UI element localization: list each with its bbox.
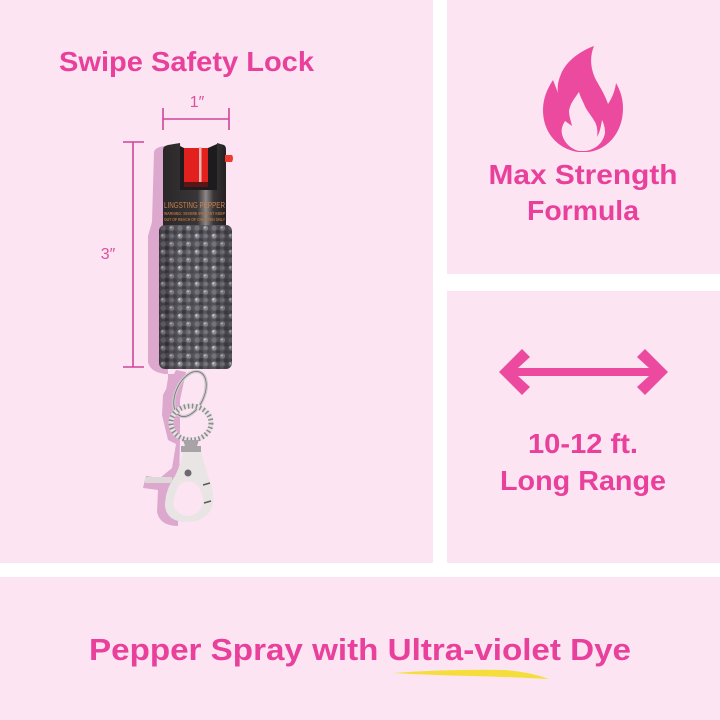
yellow underline [393, 670, 549, 679]
panel: max strength formula [447, 0, 720, 274]
warning label: OUT OF REACH OF CHILDREN ONLY [164, 217, 225, 222]
spray cap [163, 143, 233, 226]
heading: max strength formula: Max Strength [488, 159, 678, 190]
width dimension: 1 inch: 1″ [190, 94, 205, 111]
heading: range: 10-12 ft. [528, 428, 638, 459]
jump ring [171, 406, 211, 440]
heading: max strength formula: Formula [527, 195, 639, 226]
heading: pepper spray with ultra-violet dye: Pepper Spray with Ultra-violet Dye [89, 632, 631, 667]
heading: max strength formula [488, 159, 678, 226]
height dimension: 3 inches [101, 142, 144, 367]
heading: swipe safety lock: Swipe Safety Lock [59, 46, 314, 77]
icon: double arrow [499, 349, 668, 395]
lobster clasp [145, 440, 213, 522]
icon: flame [543, 46, 623, 152]
height dimension: 3 inches: 3″ [101, 246, 116, 263]
panel: long range [447, 291, 720, 563]
warning label: LINGSTING PEPPER [164, 201, 225, 210]
panel: product [0, 0, 433, 563]
panel: ultra-violet footer [0, 577, 720, 720]
split ring [167, 366, 213, 422]
width dimension: 1 inch [163, 94, 229, 130]
heading: range: Long Range [500, 465, 666, 496]
product: pepper spray keychain [145, 143, 233, 522]
rhinestone sleeve [159, 225, 232, 369]
warning label: WARNING: SEVERE IRRITANT KEEP [164, 211, 225, 216]
warning label [164, 201, 225, 222]
product shadow [143, 146, 186, 526]
heading: range [500, 428, 666, 496]
